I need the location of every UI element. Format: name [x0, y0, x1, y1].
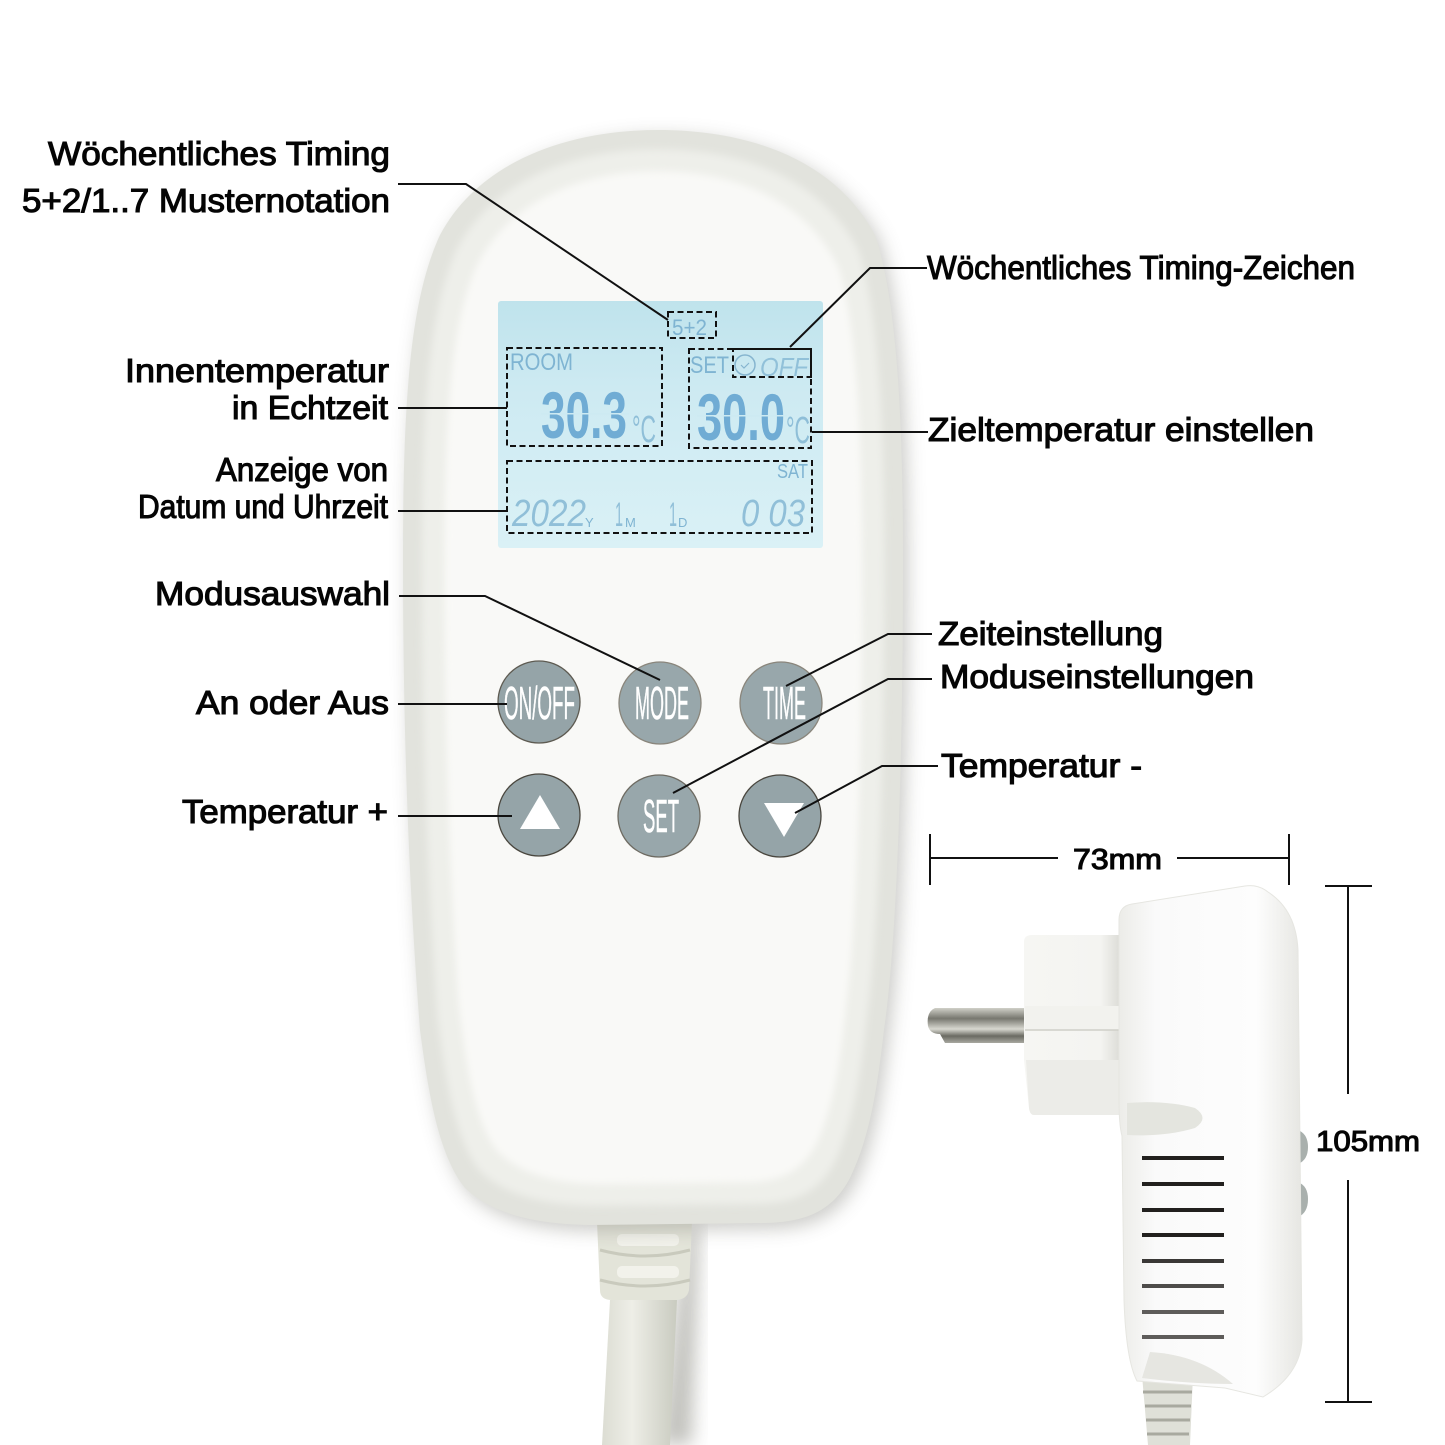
plug ventilation slots: [1142, 1156, 1224, 1339]
label: time setting: Zeiteinstellung: [938, 615, 1163, 652]
label: weekly timing pattern: Wöchentliches Timing: [48, 135, 390, 172]
LCD date and time readout: 1: [615, 496, 623, 534]
button: TIME: [740, 662, 822, 744]
label: date and time display: Anzeige von: [216, 451, 388, 488]
controller body: [403, 130, 908, 1231]
button: MODE: [619, 662, 701, 744]
button: SET: SET: [643, 790, 679, 842]
label: temperature plus: Temperatur +: [182, 793, 388, 830]
label: weekly timing sign: Wöchentliches Timing-Zeichen: [927, 249, 1355, 286]
LCD screen: [498, 301, 823, 548]
plug side view: [928, 886, 1308, 1445]
LCD date and time readout: D: [678, 515, 687, 530]
plug cable strain relief: [1142, 1375, 1193, 1445]
LCD date and time readout: 0 03: [741, 493, 805, 535]
label: weekly timing pattern: 5+2/1..7 Musternotation: [22, 182, 390, 219]
label: weekly timing pattern: [22, 135, 390, 219]
cord of the controller: [597, 1222, 700, 1445]
button: ON/OFF: [498, 661, 580, 743]
plug side buttons: [1298, 1130, 1308, 1217]
LCD set temperature readout: OFF: [760, 352, 810, 382]
dimension: width 73mm: 73mm: [1073, 844, 1162, 876]
LCD date and time readout: M: [625, 515, 636, 530]
LCD room temperature readout: 30.3: [541, 378, 627, 452]
LCD set temperature readout: [690, 352, 810, 454]
label: date and time display: Datum und Uhrzeit: [138, 488, 388, 525]
leader lines: [398, 184, 938, 816]
button: TIME: TIME: [763, 677, 806, 729]
LCD set temperature readout: °C: [786, 410, 810, 452]
LCD room temperature readout: ROOM: [510, 349, 573, 376]
LCD date and time readout: 1: [669, 496, 677, 534]
button: temperature up: [498, 774, 580, 856]
label: temperature minus: Temperatur -: [941, 747, 1142, 784]
label: date and time display: [138, 451, 388, 525]
dimension: height 105mm: 105mm: [1316, 1126, 1420, 1158]
label: mode settings: Moduseinstellungen: [940, 658, 1254, 695]
plug metal pin: [928, 1008, 1026, 1043]
LCD date and time readout: [511, 461, 808, 535]
label: indoor temperature: in Echtzeit: [232, 389, 388, 426]
label: mode selection: Modusauswahl: [155, 575, 390, 612]
label: indoor temperature: Innentemperatur: [125, 352, 389, 389]
LCD mode indicator: 5+2: [672, 315, 707, 340]
button: temperature down: [739, 775, 821, 857]
button: SET: [618, 775, 700, 857]
LCD room temperature readout: °C: [632, 409, 656, 451]
label: on or off: An oder Aus: [196, 684, 389, 721]
plug housing: [1119, 886, 1302, 1397]
dimension: height 105mm: [1316, 886, 1420, 1402]
plug round socket part: [1024, 935, 1126, 1115]
text: MODE: [635, 677, 689, 729]
dimension: width 73mm: [930, 834, 1289, 885]
label: indoor temperature: [125, 352, 389, 426]
LCD set temperature readout: SET: [690, 352, 729, 379]
LCD date and time readout: 2022: [511, 493, 586, 535]
LCD date and time readout: Y: [585, 515, 594, 530]
dashed highlight boxes: [507, 312, 812, 533]
text: ON/OFF: [504, 677, 575, 729]
LCD room temperature readout: [510, 349, 656, 452]
LCD set temperature readout: 30.0: [697, 380, 785, 454]
LCD date and time readout: SAT: [777, 461, 808, 483]
label: set target temperature: Zieltemperatur einstellen: [928, 411, 1314, 448]
